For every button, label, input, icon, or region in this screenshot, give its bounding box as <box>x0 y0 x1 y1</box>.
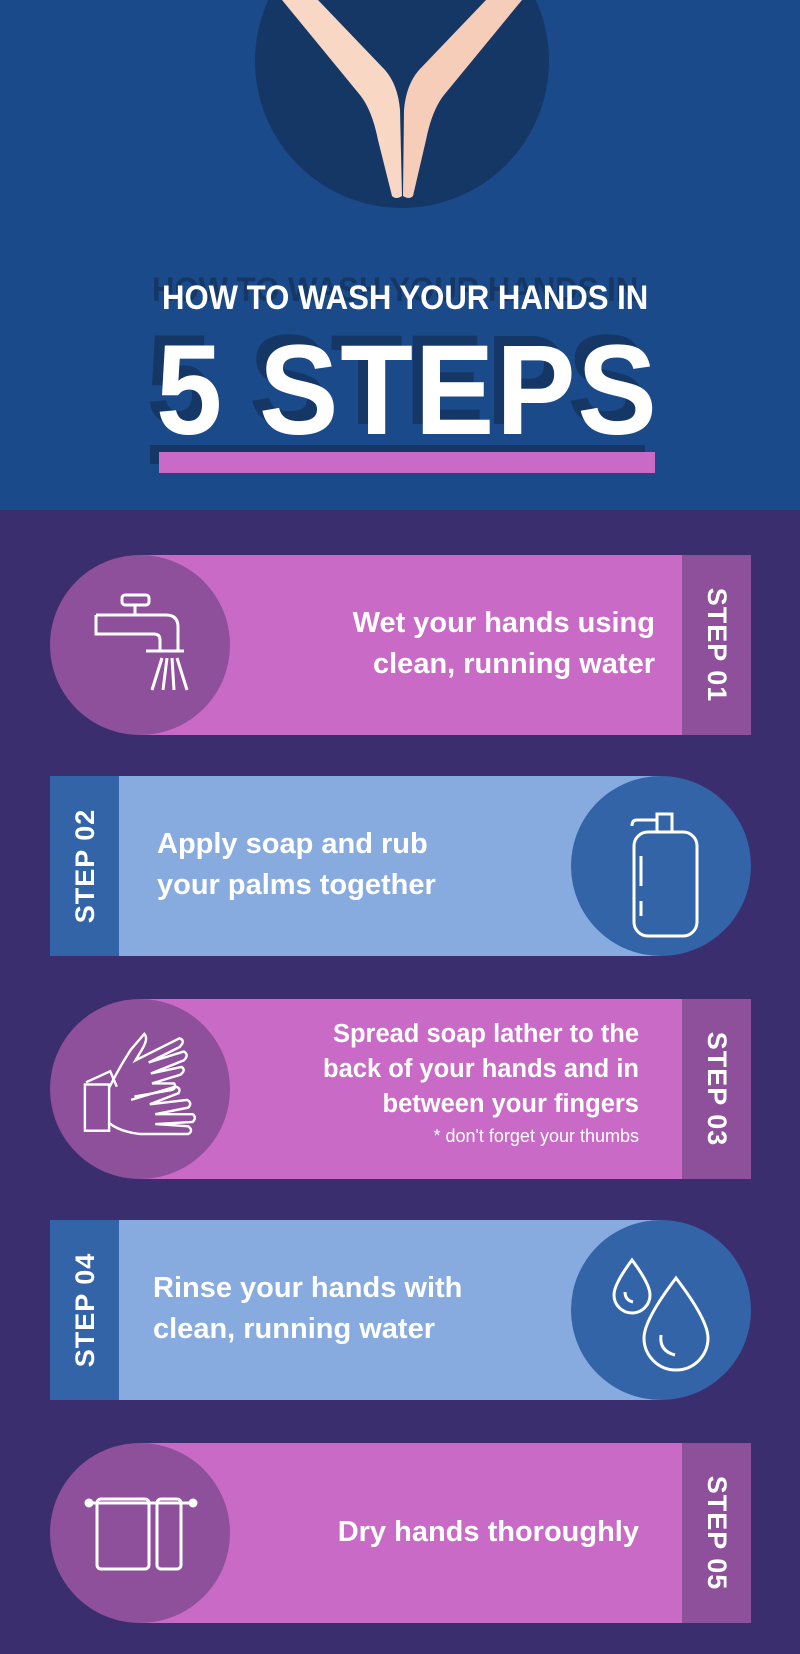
text: Wet your hands using <box>353 607 655 639</box>
icon: soap <box>571 776 751 956</box>
panel: step 02 <box>50 776 751 956</box>
text: Dry hands thoroughly <box>338 1516 639 1548</box>
text <box>157 828 436 901</box>
panel: step 05 <box>50 1443 751 1623</box>
note: * don't forget your thumbs <box>433 1126 639 1146</box>
icon: drops <box>571 1220 751 1400</box>
text: Rinse your hands with <box>153 1272 462 1304</box>
text: clean, running water <box>373 648 655 680</box>
text: between your fingers <box>383 1090 639 1118</box>
text <box>153 1272 462 1345</box>
title: 5 STEPS <box>156 319 659 462</box>
label <box>682 1443 751 1623</box>
title: 5 STEPS <box>146 309 649 452</box>
label <box>682 999 751 1179</box>
panel: step 04 <box>50 1220 751 1400</box>
title: HOW TO WASH YOUR HANDS IN <box>162 279 648 317</box>
label: STEP 01 <box>702 588 732 702</box>
title: HOW TO WASH YOUR HANDS IN <box>152 271 638 309</box>
text: Spread soap lather to the <box>333 1020 639 1048</box>
icon: faucet <box>50 555 230 735</box>
label <box>682 555 751 735</box>
text: clean, running water <box>153 1313 435 1345</box>
label <box>50 1220 119 1400</box>
label: STEP 02 <box>70 809 100 923</box>
title <box>146 271 659 473</box>
label: STEP 04 <box>70 1253 100 1367</box>
icon: towels <box>50 1443 230 1623</box>
panel: step 03 <box>50 999 751 1179</box>
icon: hands <box>50 999 230 1179</box>
text <box>352 607 655 680</box>
text <box>323 1020 639 1118</box>
header panel <box>0 0 800 510</box>
label <box>50 776 119 956</box>
label: STEP 05 <box>702 1476 732 1590</box>
text: back of your hands and in <box>323 1055 639 1083</box>
text: Apply soap and rub <box>157 828 428 860</box>
illustration: hands in circle <box>255 0 549 208</box>
label: STEP 03 <box>702 1032 732 1146</box>
text: your palms together <box>157 869 436 901</box>
panel: step 01 <box>50 555 751 735</box>
